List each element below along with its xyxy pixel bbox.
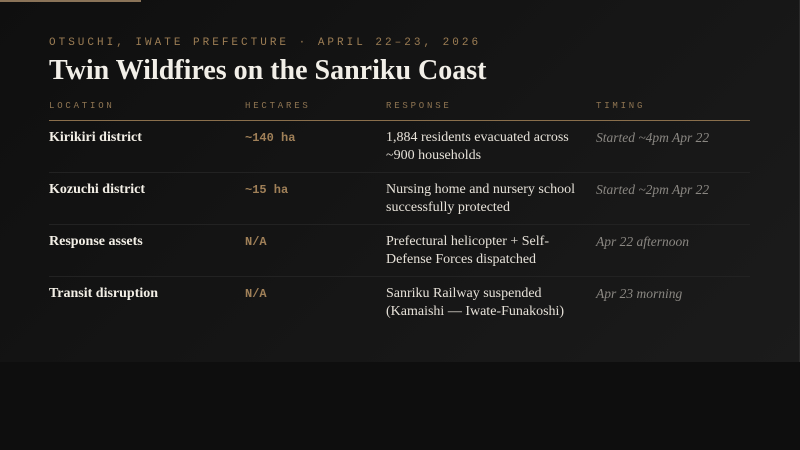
row: Transit: Transit disruption [49,286,158,301]
row: Transit [49,286,682,319]
row: Kirikiri: ~140 ha [245,131,295,145]
row: Kozuchi [49,173,750,225]
row: Kozuchi: ~15 ha [245,183,288,197]
row: Kirikiri: Kirikiri district [49,130,142,145]
row: Kirikiri: 1,884 residents evacuated across ~900 households [386,130,569,163]
header: location: LOCATION [49,101,115,111]
header: timing: TIMING [596,101,645,111]
row: Response assets: Apr 22 afternoon [596,234,689,249]
title: Twin Wildfires on the Sanriku Coast [49,55,486,86]
header: hectares: HECTARES [245,101,311,111]
row: Response assets: N/A [245,235,267,249]
row: Kozuchi: Started ~2pm Apr 22 [596,182,709,197]
row: Kozuchi: Kozuchi district [49,182,145,197]
row: Response assets: Response assets [49,234,143,249]
row: Kozuchi: Nursing home and nursery school successfully protected [386,182,575,215]
row: Kirikiri [49,121,750,173]
header: response: RESPONSE [386,101,452,111]
row: Response assets: Prefectural helicopter + Self-Defense Forces dispatched [386,234,549,267]
row: Transit: Sanriku Railway suspended (Kamaishi — Iwate-Funakoshi) [386,286,564,319]
eyebrow: OTSUCHI, IWATE PREFECTURE · APRIL 22–23, 2026 [49,37,481,49]
row: Kirikiri: Started ~4pm Apr 22 [596,130,709,145]
row: Response assets [49,225,750,277]
progress bar [0,0,141,2]
row: Transit: Apr 23 morning [596,286,682,301]
row: Transit: N/A [245,287,267,301]
